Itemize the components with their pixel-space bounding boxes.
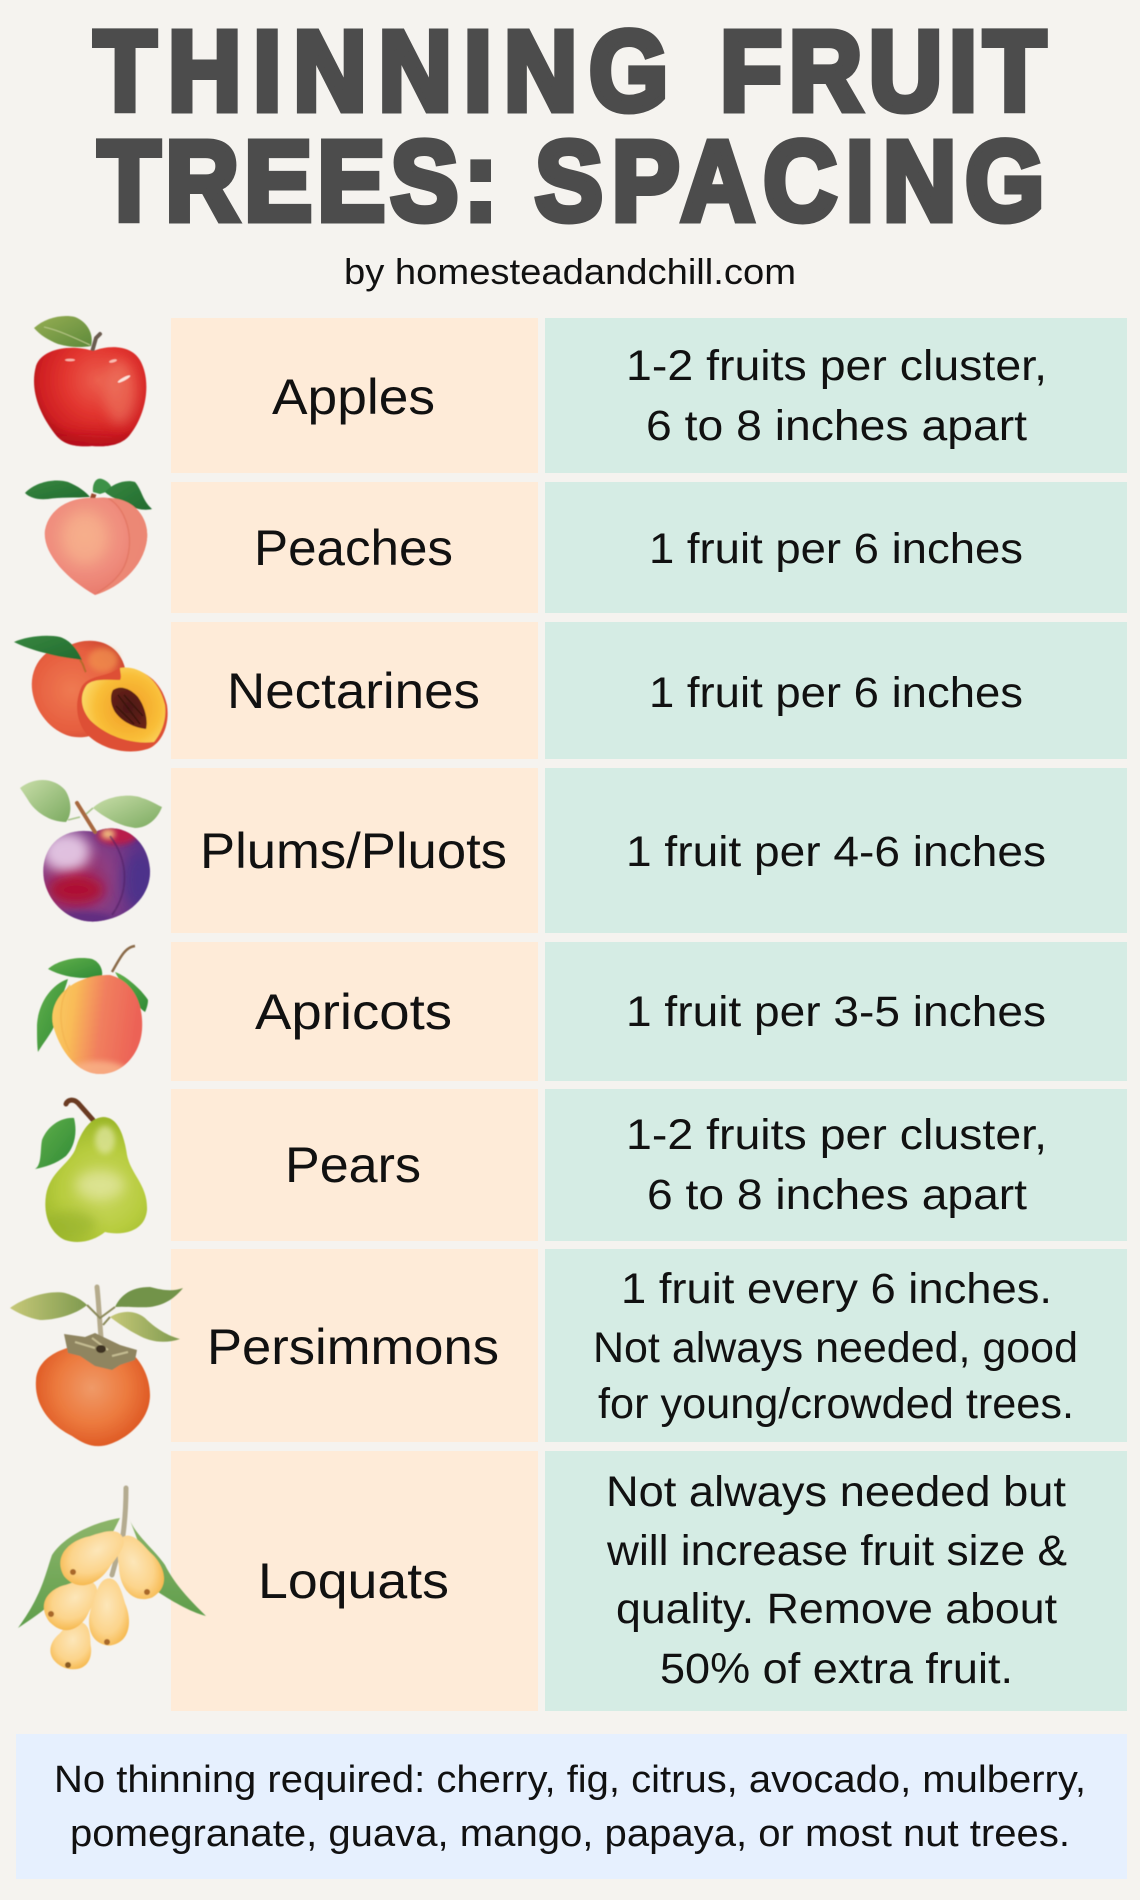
row: apricots: Apricots [255, 984, 452, 1040]
callout: no thinning required: pomegranate, guava, mango, papaya, or most nut trees. [70, 1813, 1070, 1855]
title: SPACING [535, 118, 1044, 244]
row: persimmons: 1 fruit every 6 inches. [621, 1265, 1052, 1313]
row: apples [171, 318, 1127, 473]
icon: apricot [37, 946, 148, 1087]
row: persimmons: Not always needed, good [593, 1324, 1078, 1372]
row: nectarines: Nectarines [227, 663, 480, 719]
row: persimmons [171, 1249, 1127, 1442]
title [94, 8, 1046, 244]
row: peaches: Peaches [254, 520, 453, 576]
row: loquats: will increase fruit size & [606, 1527, 1067, 1575]
row: peaches: 1 fruit per 6 inches [649, 525, 1023, 573]
row: nectarines [171, 622, 1127, 759]
icon: peach [25, 479, 152, 595]
row: peaches [171, 482, 1127, 613]
row: apricots [171, 942, 1127, 1081]
row: persimmons: for young/crowded trees. [598, 1380, 1074, 1428]
row: apples: Apples [272, 369, 435, 425]
title: TREES: [98, 118, 498, 244]
row: pears: 6 to 8 inches apart [647, 1171, 1027, 1219]
row: apples: 6 to 8 inches apart [646, 402, 1027, 450]
callout: no thinning required: No thinning required: cherry, fig, citrus, avocado, mulberry, [54, 1759, 1086, 1801]
row: plums/pluots: 1 fruit per 4-6 inches [626, 828, 1046, 876]
row: pears: Pears [285, 1137, 421, 1193]
icon: apple [34, 316, 146, 459]
icon: loquats [18, 1488, 206, 1675]
row: loquats: 50% of extra fruit. [660, 1645, 1013, 1693]
row: apricots: 1 fruit per 3-5 inches [626, 988, 1046, 1036]
row: persimmons: Persimmons [207, 1319, 499, 1375]
row: loquats: quality. Remove about [616, 1585, 1057, 1633]
row: pears [171, 1089, 1127, 1241]
row: loquats: Not always needed but [606, 1468, 1066, 1516]
icon: plum [20, 780, 162, 929]
row: loquats: Loquats [258, 1553, 449, 1609]
title: THINNING [94, 8, 668, 134]
row: pears: 1-2 fruits per cluster, [626, 1111, 1047, 1159]
title: FRUIT [720, 8, 1046, 134]
row: apples: 1-2 fruits per cluster, [626, 342, 1047, 390]
icon: pear [35, 1100, 147, 1242]
row: plums/pluots [171, 768, 1127, 933]
row: loquats [171, 1451, 1127, 1711]
row: nectarines: 1 fruit per 6 inches [649, 669, 1023, 717]
byline: by homesteadandchill.com [344, 251, 796, 292]
icon: persimmon [10, 1287, 183, 1446]
icon: nectarine [14, 636, 168, 751]
callout: no thinning required [16, 1734, 1127, 1879]
row: plums/pluots: Plums/Pluots [200, 823, 507, 879]
